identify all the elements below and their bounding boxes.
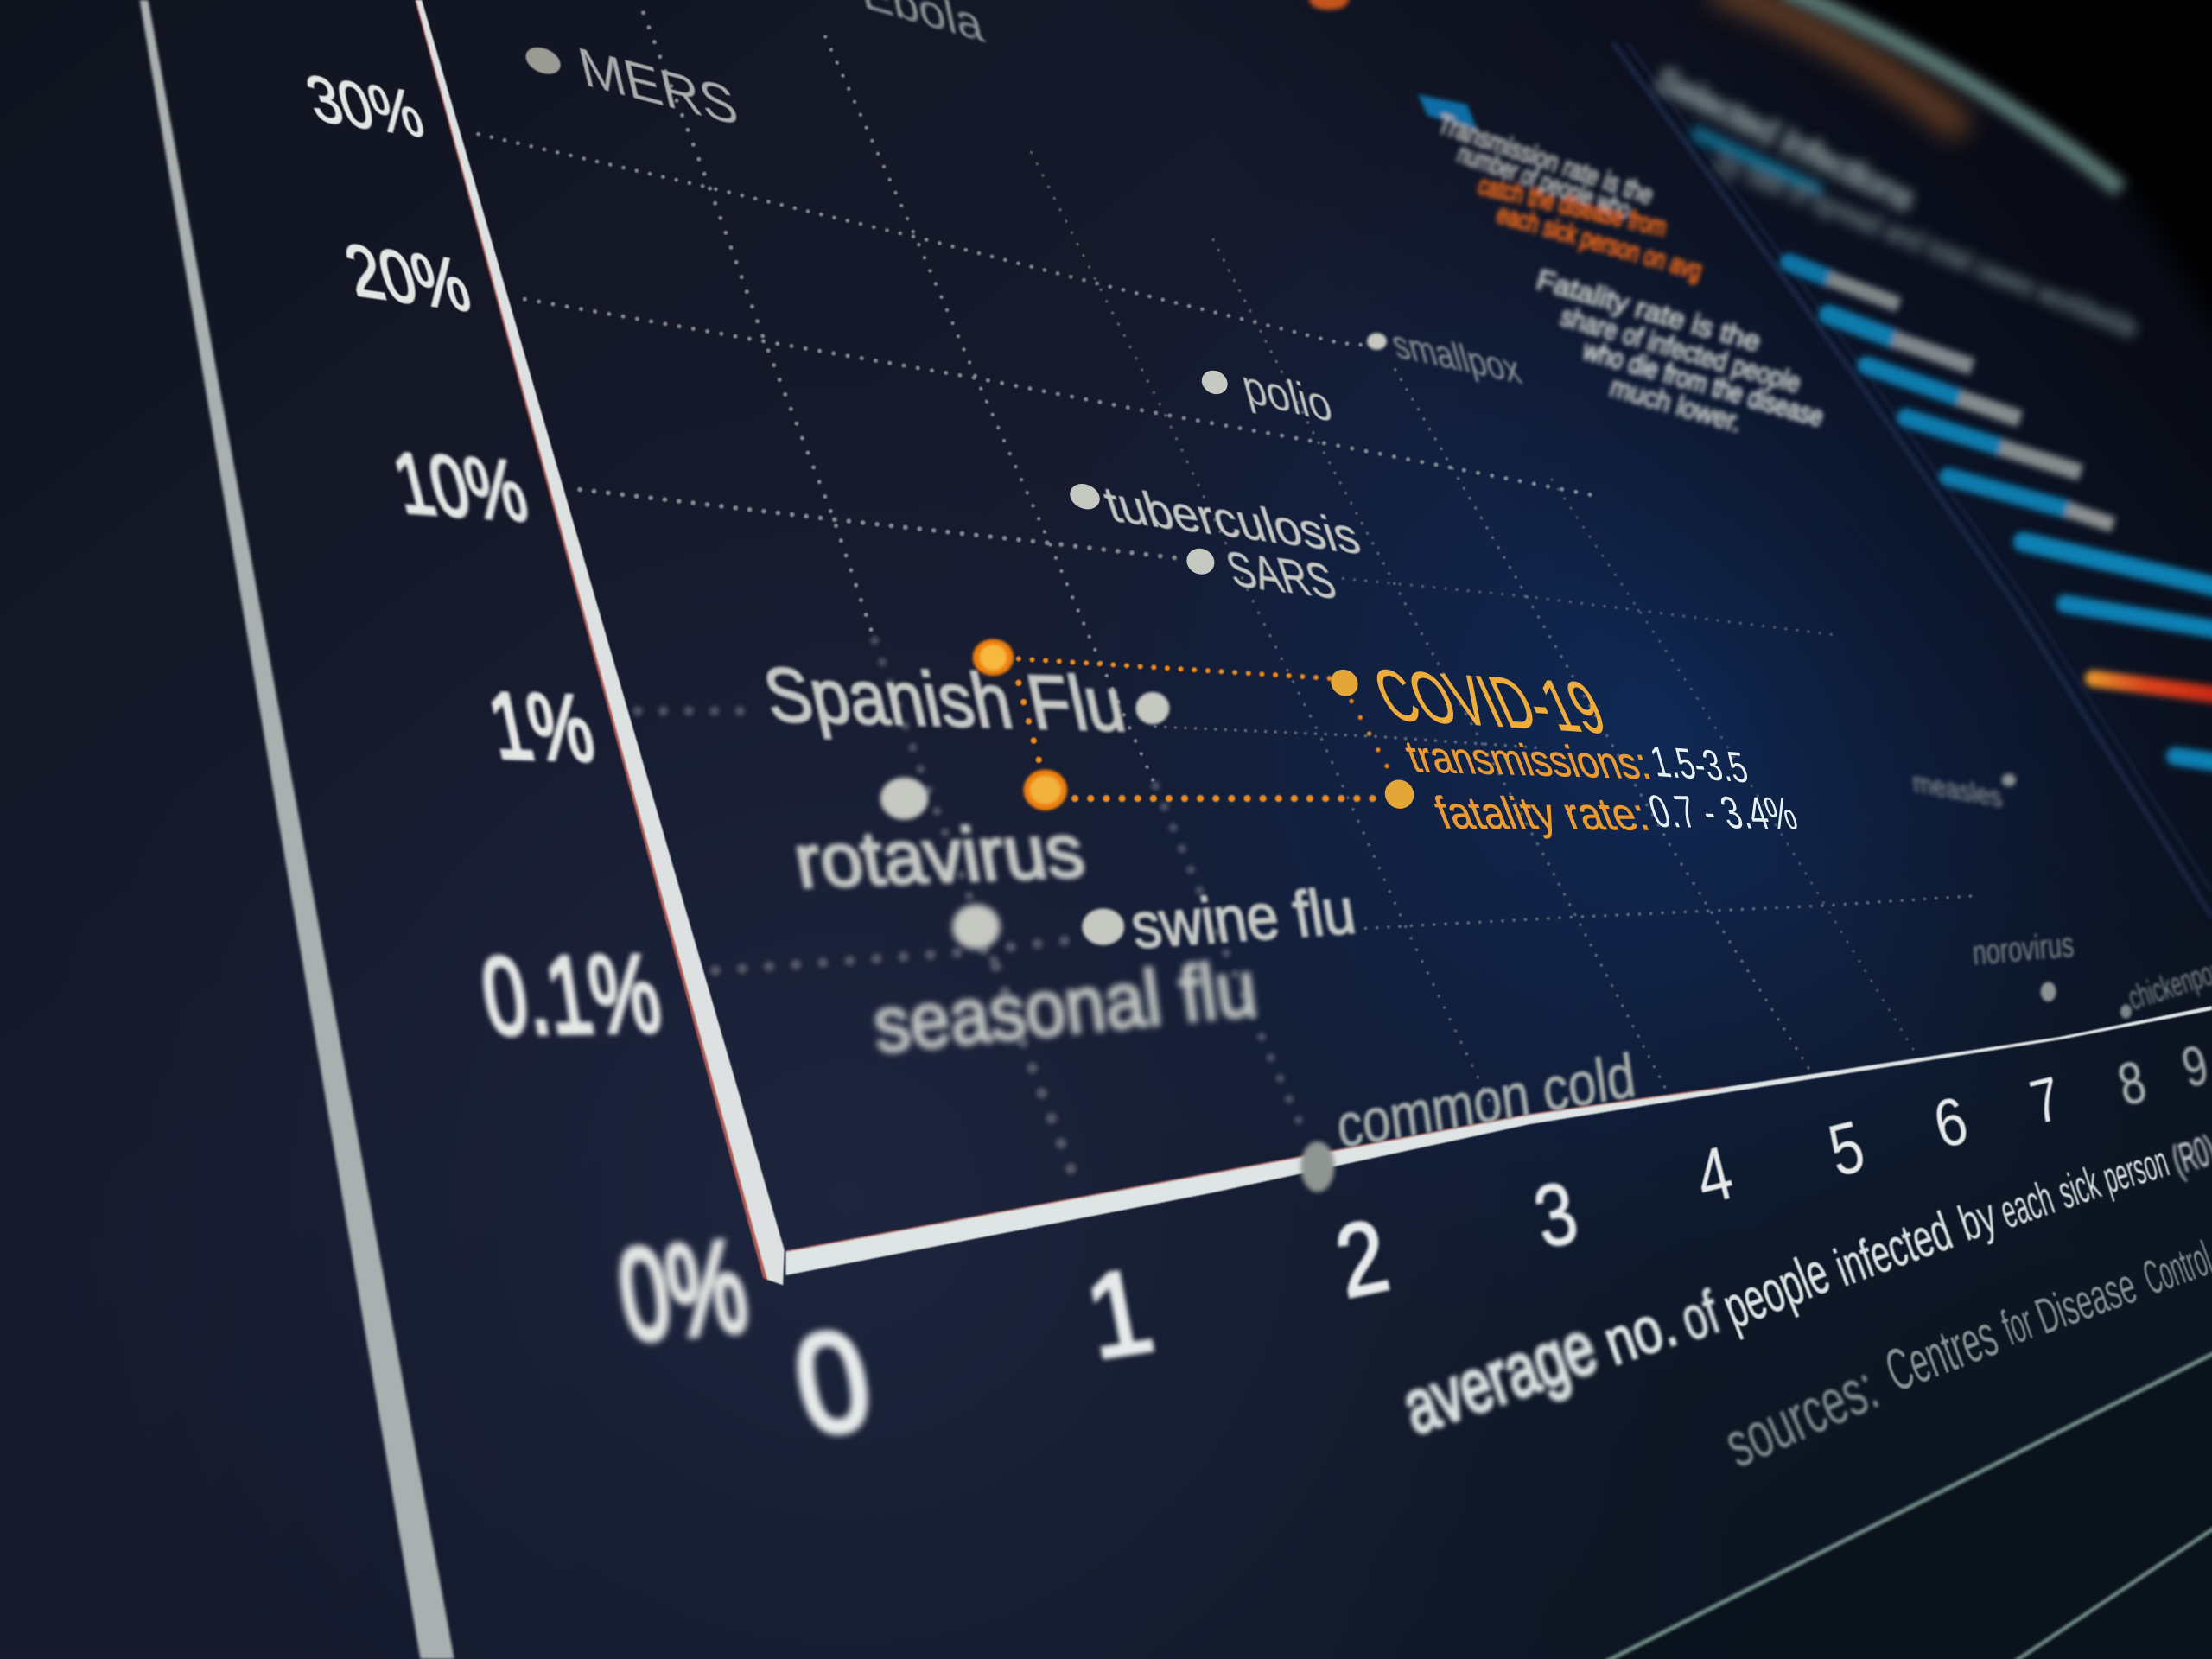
fatality rate row: fatality rate: xyxy=(1427,787,1656,840)
second blurred note: share of infected people xyxy=(1557,300,1805,398)
point: SARS xyxy=(1182,542,1343,610)
x axis title: infected xyxy=(1827,1201,1960,1298)
x axis title: no. xyxy=(1595,1287,1685,1379)
outer left frame line xyxy=(140,0,454,1659)
point: Spanish Flu: Spanish Flu xyxy=(756,652,1132,747)
orange marker bottom left xyxy=(1023,770,1067,810)
second blurred note: Fatality rate is the xyxy=(1533,263,1764,358)
bar 9 xyxy=(2176,756,2212,763)
sources note: for xyxy=(1995,1294,2041,1357)
y axis line xyxy=(415,0,785,1285)
tick 1: 1 xyxy=(1076,1244,1162,1384)
sources note: sources: xyxy=(1714,1351,1888,1481)
tick 3: 3 xyxy=(1526,1163,1586,1267)
point: norovirus xyxy=(1971,925,2075,1001)
x axis title: average xyxy=(1392,1303,1606,1450)
point: norovirus: norovirus xyxy=(1971,925,2075,973)
bar 5 xyxy=(1948,477,2113,524)
right panel: horizontal bar chart xyxy=(1789,263,2212,763)
label 30%: 30% xyxy=(298,60,432,152)
tick 0: 0 xyxy=(783,1300,883,1465)
point: common cold: common cold xyxy=(1332,1041,1639,1162)
label 0.1%: 0.1% xyxy=(474,932,668,1058)
point: MERS: MERS xyxy=(573,35,744,137)
sources note: Centres xyxy=(1877,1302,2006,1404)
panel divider xyxy=(1612,42,2212,917)
transmissions row: 1.5-3.5 xyxy=(1645,736,1753,791)
fatality rate row xyxy=(1427,786,1803,840)
x axis title: sick xyxy=(2052,1157,2107,1219)
x axis title: each xyxy=(1993,1171,2060,1238)
data points and labels xyxy=(521,0,2212,1192)
x axis title: by xyxy=(1952,1187,2004,1252)
cropped orange element at top edge xyxy=(1309,0,1349,10)
small blurred note at the top: number of people who xyxy=(1454,138,1635,226)
x axis line xyxy=(785,1006,2212,1275)
tick 6: 6 xyxy=(1926,1081,1974,1162)
right panel: blurred heading xyxy=(1650,61,2142,344)
bar 8: highlighted COVID-19 xyxy=(2094,678,2212,696)
COVID-19 callout text xyxy=(1362,654,1803,840)
point: smallpox: smallpox xyxy=(1386,321,1526,393)
point: polio: polio xyxy=(1236,359,1338,433)
label 10%: 10% xyxy=(385,435,537,540)
small blurred note at the top: Transmission rate is the xyxy=(1434,108,1657,211)
bar 3 xyxy=(1866,365,2020,419)
point: MERS xyxy=(521,35,744,137)
x axis title xyxy=(1392,1127,2212,1450)
tick 5: 5 xyxy=(1821,1104,1872,1192)
bottom right frame lines xyxy=(1605,1353,2212,1659)
label 1%: 1% xyxy=(480,673,602,782)
small blurred note at the top xyxy=(1418,94,1706,286)
right panel: blurred heading: by rate of spread and total cases worldwide xyxy=(1712,145,2142,344)
orange marker top right xyxy=(1325,664,1363,702)
small blurred note at the top: each sick person on avg xyxy=(1494,198,1706,286)
COVID-19 highlight range xyxy=(973,639,1420,815)
tick 8: 8 xyxy=(2112,1048,2152,1119)
bar 6 xyxy=(2023,542,2212,588)
second blurred note: much lower. xyxy=(1606,370,1745,438)
tick 7: 7 xyxy=(2024,1064,2068,1138)
callout heading: COVID-19 xyxy=(1362,654,1618,749)
second blurred note: who die from the disease xyxy=(1580,334,1827,433)
right panel: blurred heading: Selected infections xyxy=(1650,61,1920,218)
grid: dotted horizontal and vertical lines xyxy=(478,13,1975,1191)
point: common cold xyxy=(1300,1041,1639,1192)
bar 4 xyxy=(1906,417,2081,473)
orange marker top left xyxy=(973,639,1014,676)
label 20%: 20% xyxy=(337,229,479,328)
bezel glare at the top right edge xyxy=(1714,0,2120,189)
sources note xyxy=(1714,1231,2212,1481)
x axis tick labels xyxy=(783,1033,2212,1465)
point: SARS: SARS xyxy=(1219,542,1343,610)
orange dotted connector lines xyxy=(1019,658,1394,798)
x axis title: people xyxy=(1713,1239,1838,1341)
tick 2: 2 xyxy=(1327,1198,1397,1319)
x axis title: of xyxy=(1672,1278,1728,1355)
point: seasonal flu: seasonal flu xyxy=(868,944,1262,1070)
transmissions row: transmissions: xyxy=(1399,732,1657,789)
bar 2 xyxy=(1828,315,1972,366)
point: measles: measles xyxy=(1910,766,2005,813)
y axis labels xyxy=(298,60,756,1368)
fatality rate row: 0.7 - 3.4% xyxy=(1643,786,1803,839)
label 0%: 0% xyxy=(609,1213,756,1368)
bar 1 xyxy=(1789,263,1899,305)
small blurred note at the top: catch the disease from xyxy=(1476,169,1669,242)
second blurred note xyxy=(1533,263,1827,438)
point: tuberculosis: tuberculosis xyxy=(1097,477,1367,565)
point: swine flu: swine flu xyxy=(1125,874,1360,962)
chart axes xyxy=(415,0,2212,1285)
bar 7 xyxy=(2065,604,2212,631)
tick 4: 4 xyxy=(1688,1129,1741,1221)
point: rotavirus: rotavirus xyxy=(787,808,1090,904)
orange marker bottom right xyxy=(1379,774,1420,815)
